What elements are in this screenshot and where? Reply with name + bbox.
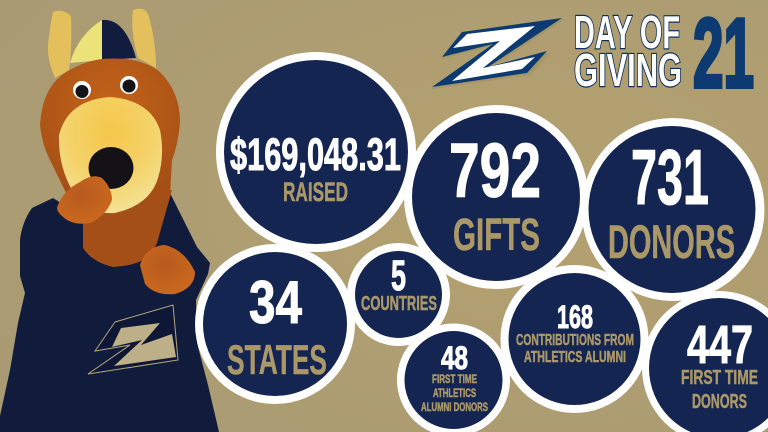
circle: gifts: 792: [449, 128, 541, 214]
eyes: [73, 76, 138, 99]
circle: first time donors: [642, 291, 768, 432]
header title: Day of Giving: [574, 6, 682, 96]
circle: first time athletics alumni donors: ATHLETICS: [433, 388, 476, 400]
header title: Day of Giving: GIVING: [574, 44, 682, 96]
circle: first time athletics alumni donors: 48: [441, 340, 468, 376]
circle: contributions from athletics alumni: [500, 265, 648, 413]
head: [40, 59, 180, 195]
circle: first time athletics alumni donors: ALUMNI DONORS: [421, 402, 488, 414]
muzzle: [59, 97, 162, 213]
circle: raised: RAISED: [283, 177, 348, 207]
circle: contributions from athletics alumni: 168: [557, 299, 593, 335]
circle: raised: [216, 52, 416, 252]
shirt Z logo: [88, 305, 178, 374]
left ear: [48, 11, 71, 78]
mascot: [0, 9, 219, 432]
cap: [70, 20, 136, 63]
header logo Z: [431, 18, 565, 89]
circle: countries: COUNTRIES: [361, 293, 437, 315]
circle: states: 34: [249, 269, 302, 336]
circle: donors: [582, 118, 764, 301]
circle: contributions from athletics alumni: ATHLETICS ALUMNI: [524, 349, 626, 366]
nose: [88, 147, 134, 189]
circle: gifts: [404, 105, 588, 289]
right ear: [132, 9, 156, 68]
pointing hand: [57, 176, 112, 224]
circle: first time athletics alumni donors: [397, 324, 510, 432]
circle: donors: 731: [631, 133, 709, 221]
circle: countries: [347, 243, 450, 346]
circle: states: STATES: [227, 336, 327, 383]
circle: raised: $169,048.31: [230, 129, 401, 180]
header title: Day of Giving: DAY OF: [574, 6, 680, 58]
mascot body sweatshirt: [0, 193, 219, 432]
fist: [140, 245, 195, 294]
circle: first time athletics alumni donors: FIRST TIME: [432, 374, 477, 386]
circle: states: [195, 244, 355, 404]
circle: contributions from athletics alumni: CONTRIBUTIONS FROM: [516, 332, 634, 349]
circle: gifts: GIFTS: [453, 209, 540, 260]
circle: countries: 5: [391, 252, 406, 300]
mascot chest fur: [70, 190, 172, 267]
